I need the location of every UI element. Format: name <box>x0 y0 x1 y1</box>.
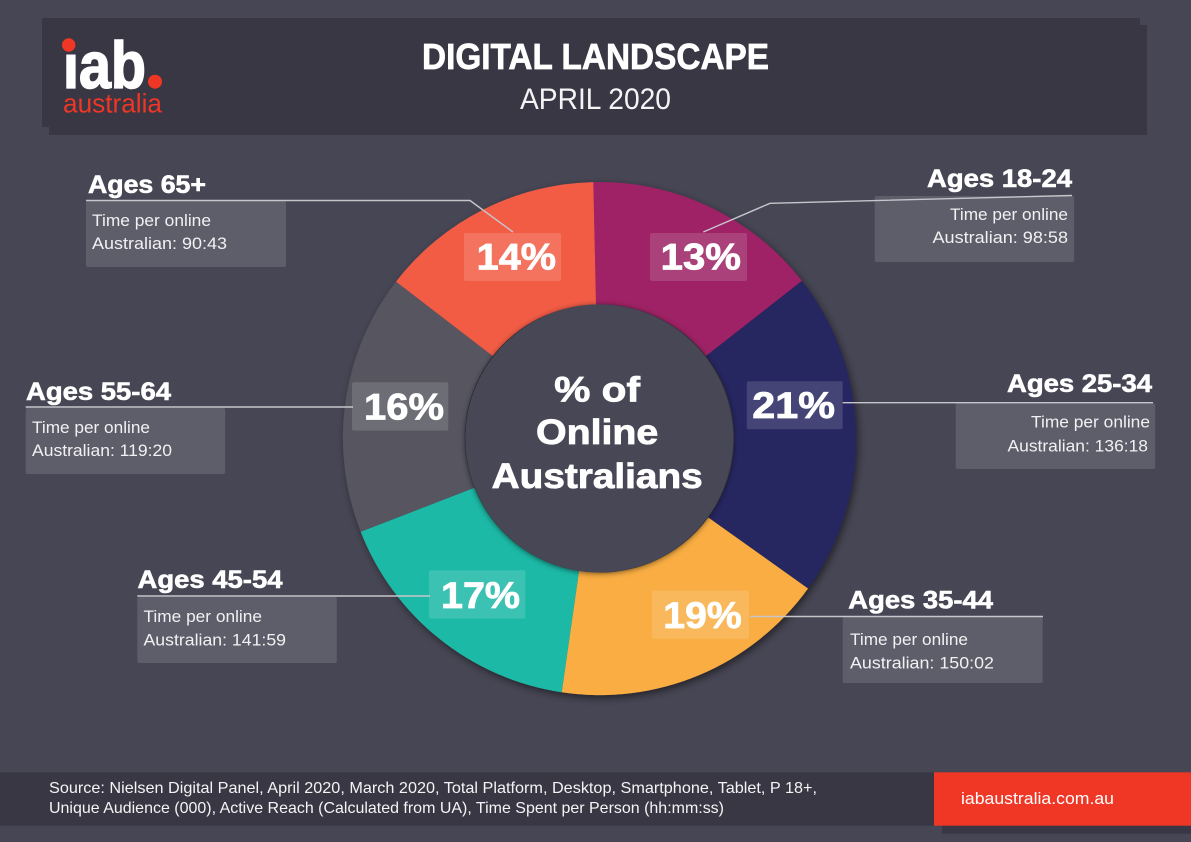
callout: ages 25-34: Time per online <box>1031 413 1150 432</box>
callout: ages 65+ <box>86 171 513 267</box>
callout: ages 55-64: Ages 55-64 <box>26 378 171 406</box>
center label <box>492 371 703 496</box>
value: 16% <box>352 382 448 431</box>
title: DIGITAL LANDSCAPE <box>422 36 769 77</box>
segment: ages 45-54 <box>361 488 579 692</box>
center hole <box>465 304 733 572</box>
value: 21% <box>747 381 843 429</box>
footer source bar <box>0 772 934 826</box>
logo: iab australia: iab <box>63 28 146 102</box>
value: 19%: 19% <box>663 595 742 636</box>
footer website button <box>934 772 1191 834</box>
callout: ages 35-44: Australian: 150:02 <box>850 653 994 672</box>
donut chart <box>343 182 856 695</box>
value: 13%: 13% <box>661 237 741 278</box>
header panel <box>42 18 1147 135</box>
callout: ages 65+: Australian: 90:43 <box>92 234 227 253</box>
segment: ages 35-44 <box>562 518 808 695</box>
center label: Online <box>536 413 658 452</box>
value: 16%: 16% <box>364 386 444 428</box>
logo: iab australia: australia <box>63 88 163 118</box>
callout: ages 35-44: Time per online <box>850 630 968 649</box>
callout: ages 55-64: Australian: 119:20 <box>32 441 172 460</box>
segment: ages 65+ <box>396 182 596 356</box>
footer source bar: Unique Audience (000), Active Reach (Calculated from UA), Time Spent per Person (hh:mm:ss) <box>49 800 724 817</box>
segment: ages 25-34 <box>706 281 856 588</box>
callout: ages 65+: Ages 65+ <box>88 171 206 199</box>
value: 17%: 17% <box>441 575 520 616</box>
segment: ages 55-64 <box>343 282 493 532</box>
center label: % of <box>554 371 640 410</box>
callout: ages 55-64 <box>26 378 353 474</box>
callout: ages 45-54 <box>137 566 430 663</box>
value: 13% <box>650 233 747 281</box>
value: 14%: 14% <box>477 237 556 278</box>
subtitle: APRIL 2020 <box>520 83 671 116</box>
footer source bar: Source: Nielsen Digital Panel, April 2020, March 2020, Total Platform, Desktop, Smartphone, Tablet, P 18+, <box>49 780 817 797</box>
center label: Australians <box>492 457 703 496</box>
callout: ages 55-64: Time per online <box>32 418 150 437</box>
callout: ages 18-24: Time per online <box>950 205 1068 224</box>
callout: ages 25-34: Australian: 136:18 <box>1008 437 1148 456</box>
callout: ages 45-54: Time per online <box>144 607 262 626</box>
value: 17% <box>429 570 525 619</box>
segment: ages 18-24 <box>593 182 802 356</box>
callout: ages 18-24 <box>703 165 1074 262</box>
callout: ages 25-34: Ages 25-34 <box>1007 370 1152 398</box>
value: 21%: 21% <box>752 385 835 426</box>
callout: ages 35-44 <box>750 586 1043 683</box>
callout: ages 35-44: Ages 35-44 <box>848 586 993 614</box>
callout: ages 25-34 <box>843 370 1155 469</box>
callout: ages 65+: Time per online <box>92 211 211 230</box>
value: 14% <box>464 233 561 281</box>
footer website button: iabaustralia.com.au <box>961 789 1114 808</box>
callout: ages 45-54: Australian: 141:59 <box>144 631 286 650</box>
callout: ages 18-24: Australian: 98:58 <box>932 228 1068 247</box>
callout: ages 45-54: Ages 45-54 <box>138 566 283 594</box>
value: 19% <box>652 590 749 639</box>
callout: ages 18-24: Ages 18-24 <box>927 165 1072 193</box>
